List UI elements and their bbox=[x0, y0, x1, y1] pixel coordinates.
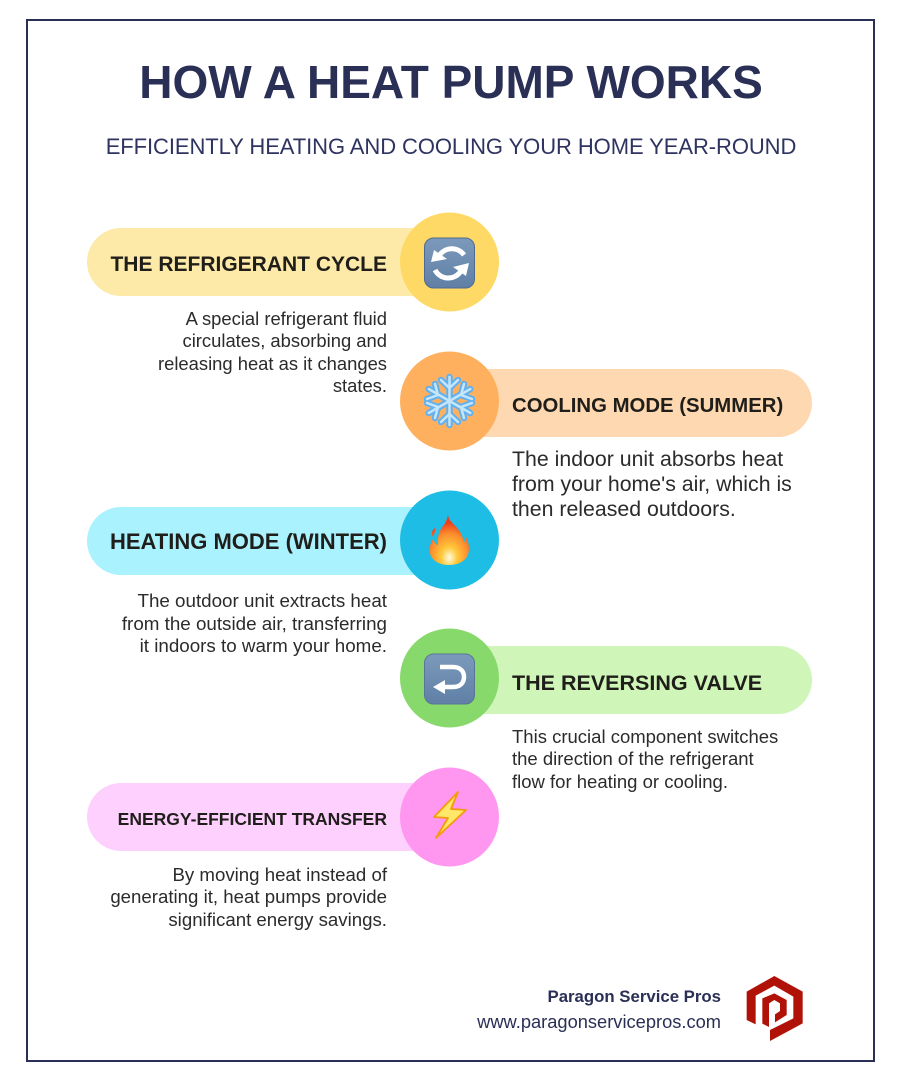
text: refrigerant cycle description bbox=[158, 308, 387, 396]
pill: the refrigerant cycle bbox=[87, 228, 420, 296]
text: energy-efficient transfer description bbox=[110, 864, 388, 930]
text: reversing valve description: the direction of the refrigerant bbox=[512, 748, 754, 769]
title: HOW A HEAT PUMP WORKS bbox=[139, 56, 763, 108]
pill: the reversing valve: THE REVERSING VALVE bbox=[512, 671, 762, 695]
pill: energy-efficient transfer: ENERGY-EFFICIENT TRANSFER bbox=[118, 808, 387, 828]
text: cooling mode description: from your home's air, which is bbox=[512, 472, 792, 496]
pill: cooling mode bbox=[480, 369, 812, 437]
text: energy-efficient transfer description: By moving heat instead of bbox=[172, 864, 387, 885]
footer: company name: Paragon Service Pros bbox=[548, 987, 721, 1006]
text: cooling mode description: The indoor unit absorbs heat bbox=[512, 447, 783, 471]
text: heating mode description: from the outside air, transferring bbox=[122, 612, 387, 634]
pill: heating mode bbox=[87, 507, 420, 575]
text: reversing valve description bbox=[512, 726, 778, 792]
text: refrigerant cycle description: A special refrigerant fluid bbox=[186, 308, 387, 329]
text: energy-efficient transfer description: significant energy savings. bbox=[168, 909, 387, 930]
text: heating mode description: The outdoor unit extracts heat bbox=[137, 590, 387, 611]
pill: cooling mode: COOLING MODE (SUMMER) bbox=[512, 395, 783, 417]
text: heating mode description bbox=[122, 590, 387, 656]
text: reversing valve description: This crucial component switches bbox=[512, 726, 778, 747]
icon: pink circle with lightning bolt bbox=[400, 768, 499, 866]
icon: blue circle with flame bbox=[400, 490, 499, 590]
text: refrigerant cycle description: releasing heat as it changes bbox=[158, 353, 387, 374]
pill: energy-efficient transfer bbox=[87, 783, 420, 851]
text: cooling mode description bbox=[512, 447, 792, 521]
subtitle: EFFICIENTLY HEATING AND COOLING YOUR HOME YEAR-ROUND bbox=[106, 134, 796, 159]
text: heating mode description: it indoors to warm your home. bbox=[140, 635, 387, 656]
text: cooling mode description: then released outdoors. bbox=[512, 497, 736, 521]
text: refrigerant cycle description: circulates, absorbing and bbox=[183, 330, 387, 351]
logo: Paragon hexagon mark bbox=[746, 976, 803, 1041]
footer: website: www.paragonservicepros.com bbox=[477, 1011, 721, 1032]
icon: yellow circle with cycle arrows bbox=[400, 212, 499, 312]
pill: the refrigerant cycle: THE REFRIGERANT CYCLE bbox=[110, 253, 387, 276]
icon: orange circle with snowflake bbox=[400, 352, 499, 450]
pill: heating mode: HEATING MODE (WINTER) bbox=[110, 529, 387, 554]
text: reversing valve description: flow for heating or cooling. bbox=[512, 771, 728, 792]
icon: green circle with return arrow bbox=[400, 628, 499, 728]
text: refrigerant cycle description: states. bbox=[333, 375, 387, 396]
pill: the reversing valve bbox=[480, 646, 812, 714]
text: energy-efficient transfer description: generating it, heat pumps provide bbox=[110, 886, 387, 907]
